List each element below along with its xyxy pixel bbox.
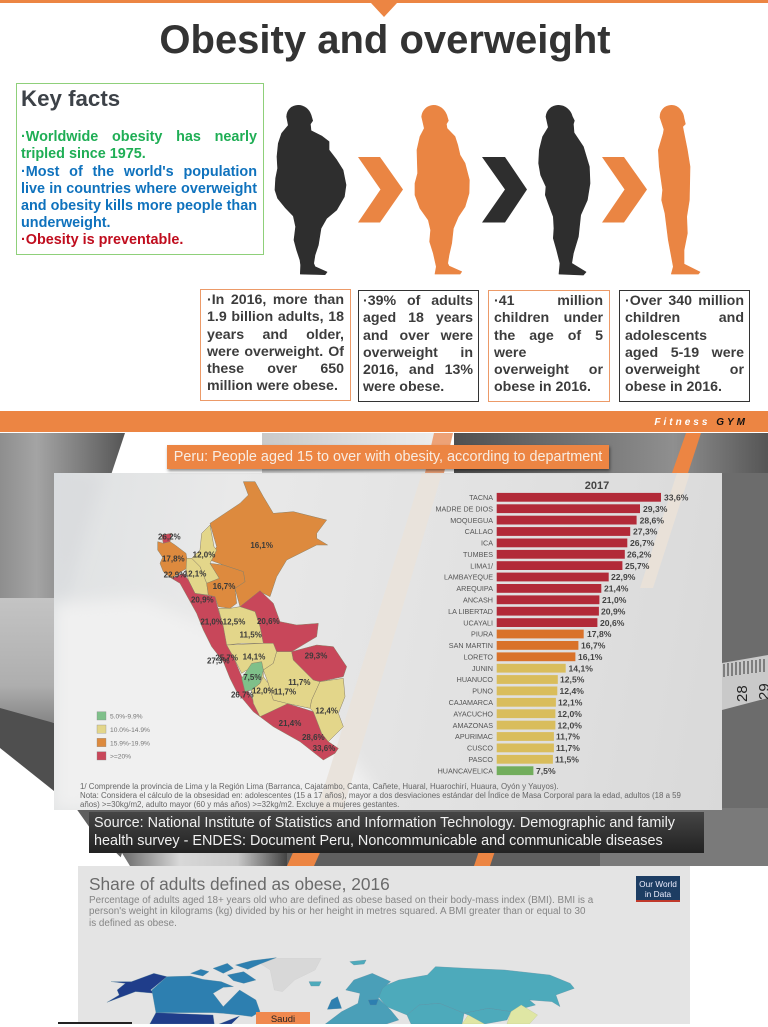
map value labels: 27,3%	[207, 656, 230, 665]
stat text 2: were obese.	[363, 379, 444, 395]
department labels: TUMBES	[463, 550, 493, 559]
stat text 4: children and	[625, 310, 744, 326]
bar values: 17,8%	[587, 629, 612, 639]
map region: Arctic islands	[191, 958, 276, 983]
bar values: 12,4%	[560, 686, 584, 696]
source note	[89, 812, 704, 853]
map value labels: 21,0%	[200, 617, 223, 626]
key facts text	[21, 129, 257, 248]
key facts text: ·Most of the world's population	[21, 164, 257, 180]
bar values: 27,3%	[633, 527, 658, 537]
department labels	[435, 493, 493, 775]
bar values: 12,0%	[558, 720, 582, 730]
map region: Huancavelica	[242, 662, 263, 692]
bar values: 11,5%	[555, 754, 579, 764]
icon: very overweight orange silhouette	[415, 105, 469, 274]
chart footnote: Nota: Considera el cálculo de la obsesidad en: adolescentes (15 a 17 años), mayor a dos desviaciones estándar del Índice de Masa Corporal para la edad, adultos (18 a 59	[80, 791, 681, 800]
department labels: LORETO	[464, 652, 493, 662]
stat text 2: 2016, and 13%	[363, 362, 473, 378]
map value labels: 26,2%	[158, 532, 181, 541]
map region: Mongolia	[464, 1008, 511, 1024]
map value labels: 17,8%	[162, 554, 185, 563]
bar values: 12,5%	[560, 675, 585, 685]
source note: Source: National Institute of Statistics and Information Technology. Demographic and family	[94, 815, 675, 831]
logo: Our World in Data: in Data	[645, 889, 671, 899]
key facts text: ·Worldwide obesity has nearly	[21, 129, 257, 145]
bar values: 11,7%	[556, 732, 580, 742]
stat text 4: aged 5-19 were	[625, 345, 744, 361]
map region: eastern United States	[219, 1016, 240, 1024]
chart footnote: 1/ Comprende la provincia de Lima y la Región Lima (Barranca, Cajatambo, Canta, Cañete, Huaral, Huarochirí, Huaura, Oyón y Yauyos).	[80, 782, 559, 790]
stat text 4	[625, 293, 744, 395]
panel: world obesity chart	[78, 866, 690, 1024]
department labels: PIURA	[471, 630, 493, 639]
bar values	[536, 492, 689, 776]
department labels: PUNO	[472, 687, 493, 696]
department labels: AREQUIPA	[456, 584, 493, 593]
map value labels: 25,7%	[215, 653, 238, 662]
department labels: AYACUCHO	[453, 709, 493, 718]
stat text 4: ·Over 340 million	[625, 293, 744, 309]
chart footnote: años) >=30kg/m2, adulto mayor (60 y más años) >=32kg/m2. Excluye a mujeres gestantes.	[80, 800, 399, 809]
map value labels: 20,6%	[257, 617, 280, 626]
stat text 1: ·In 2016, more than	[207, 292, 344, 308]
icon: orange chevron 1	[358, 157, 403, 222]
map region: Madre de Dios	[292, 645, 347, 682]
map value labels: 11,7%	[288, 678, 310, 687]
icon: overweight dark silhouette	[539, 105, 590, 275]
map value labels: 14,1%	[243, 652, 265, 661]
map legend: 10.0%-14.9%	[110, 727, 150, 734]
title: Obesity and overweight	[159, 18, 611, 62]
key facts text: underweight.	[21, 215, 111, 231]
stat text 2: overweight in	[363, 345, 473, 361]
icon: dark chevron	[482, 157, 527, 222]
map region: Tumbes	[162, 533, 172, 543]
bar values: 28,6%	[640, 515, 664, 525]
bar values: 21,4%	[604, 584, 629, 594]
stat text 3: children under	[494, 310, 603, 326]
panel: Peru chart	[54, 473, 722, 810]
map region: Greenland	[260, 958, 321, 992]
stat box 3	[488, 290, 610, 402]
bar values: 16,7%	[581, 641, 606, 651]
stat text 2: aged 18 years	[363, 310, 473, 326]
tape measure numbers: 28	[734, 685, 751, 702]
bar values: 29,3%	[643, 504, 668, 514]
map region: Cajamarca	[186, 558, 208, 595]
map corner edge	[58, 1022, 132, 1024]
chart heading: Peru: People aged 15 to over with obesity, according to department	[174, 449, 602, 465]
department labels: APURIMAC	[455, 732, 493, 741]
tape measure numbers	[724, 659, 768, 702]
icon: orange chevron 2	[602, 157, 647, 222]
map region: Piura	[158, 542, 187, 578]
map region: Ucayali	[240, 591, 318, 652]
map region: San Martin	[207, 563, 245, 608]
department labels: CAJAMARCA	[449, 698, 493, 707]
world chart description: is defined as obese.	[89, 918, 177, 929]
map region: Central Asia	[407, 1003, 464, 1024]
department labels: LAMBAYEQUE	[444, 573, 493, 582]
silhouettes and chevrons	[274, 105, 700, 276]
department labels: JUNIN	[472, 664, 493, 673]
bar values: 16,1%	[578, 652, 603, 662]
stat text 3	[494, 293, 603, 395]
map value labels: 12,0%	[193, 550, 215, 559]
chart heading	[167, 445, 609, 469]
bar values: 25,7%	[625, 561, 650, 571]
department labels: HUANUCO	[457, 675, 493, 684]
map value labels: 16,1%	[250, 541, 273, 550]
map region: United Kingdom	[327, 997, 342, 1009]
bar values: 26,7%	[630, 538, 655, 548]
stat text 1	[207, 292, 344, 394]
world chart description: person's weight in kilograms (kg) divided by his or her height in metres squared. A BMI greater than or equal to 30	[89, 906, 585, 917]
map of Peru	[96, 481, 347, 761]
map value labels: 12,4%	[315, 707, 338, 716]
map value labels: 22,9%	[164, 571, 186, 580]
stat text 3: were	[494, 345, 526, 361]
key facts text: ·Obesity is preventable.	[21, 232, 183, 248]
department labels: SAN MARTIN	[449, 641, 493, 650]
map region: South Asia	[462, 1015, 484, 1024]
map region: Canada	[152, 976, 260, 1017]
map region: Junin	[227, 643, 277, 680]
department labels: MOQUEGUA	[450, 516, 493, 525]
map region: Russia	[378, 967, 574, 1015]
icon: normal weight orange silhouette	[658, 105, 700, 274]
bar values: 33,6%	[664, 492, 689, 502]
panel: key facts	[16, 83, 264, 255]
world chart description: Percentage of adults aged 18+ years old who are defined as obese based on their body-mass index (BMI). BMI is a	[89, 894, 593, 906]
map value labels	[158, 532, 338, 753]
stat text 3: overweight or	[494, 362, 603, 378]
map value labels: 11,5%	[240, 631, 262, 640]
chart year: 2017	[585, 480, 609, 492]
map region: Amazonas	[192, 525, 219, 583]
bars	[497, 493, 661, 775]
map region: coast	[172, 573, 338, 760]
map value labels: 20,9%	[191, 595, 214, 604]
department labels: ANCASH	[463, 596, 493, 604]
stat text 1: these over 650	[207, 361, 344, 377]
banner label: Fitness GYM	[654, 417, 748, 428]
map region: Loreto	[210, 482, 328, 607]
bar values: 20,6%	[600, 618, 625, 628]
map value labels: 33,6%	[313, 744, 335, 753]
bar chart: obesity by department	[435, 480, 689, 776]
key facts text: live in countries where overweight	[21, 181, 257, 197]
stat text 3: obese in 2016.	[494, 379, 591, 395]
source note: health survey - ENDES: Document Peru, Noncommunicable and communicable diseases	[94, 833, 663, 849]
orange banner	[0, 411, 768, 432]
stat text 1: years and older,	[207, 327, 344, 343]
map tooltip	[256, 1012, 310, 1024]
map region: China	[507, 1005, 538, 1024]
logo: Our World in Data: Our World	[639, 879, 677, 889]
stat text 4: adolescents	[625, 328, 707, 344]
map region: United States	[150, 1013, 214, 1024]
map value labels: 12,1%	[184, 569, 206, 578]
map value labels: 29,3%	[305, 652, 327, 661]
world chart description	[89, 894, 594, 929]
bar values: 26,2%	[627, 550, 652, 560]
stat box 4	[619, 290, 750, 402]
bar values: 7,5%	[536, 766, 556, 776]
department labels: TACNA	[469, 493, 493, 502]
map region: Alaska	[107, 973, 167, 1002]
stat text 1: million were obese.	[207, 378, 338, 394]
map region: Cusco and Apurimac	[263, 652, 320, 708]
map value labels: 11,7%	[274, 688, 296, 697]
bar values: 20,9%	[601, 606, 626, 616]
department labels: ICA	[481, 539, 493, 548]
bar values: 11,7%	[556, 743, 580, 753]
map legend	[97, 712, 150, 761]
map region: Europe	[325, 973, 399, 1024]
department labels: LA LIBERTAD	[448, 607, 493, 616]
stat text 4: overweight or	[625, 362, 744, 378]
stat text 1: 1.9 billion adults, 18	[207, 309, 344, 325]
background photo	[0, 433, 768, 866]
map value labels: 16,7%	[213, 582, 235, 591]
department labels: CUSCO	[467, 744, 493, 753]
stat text 2: and over were	[363, 328, 473, 344]
key facts heading: Key facts	[21, 86, 120, 111]
department labels: PASCO	[468, 755, 493, 764]
map value labels: 26,7%	[231, 691, 254, 700]
department labels: UCAYALI	[463, 618, 493, 627]
map region: Svalbard	[350, 960, 366, 965]
stat text 1: were overweight. Of	[207, 344, 344, 360]
bar values: 12,1%	[558, 698, 583, 708]
map region: Ayacucho	[252, 677, 288, 717]
map value labels: 12,0%	[252, 686, 275, 695]
icon: obese dark silhouette	[275, 105, 346, 275]
map value labels: 21,4%	[279, 719, 301, 728]
department labels: MADRE DE DIOS	[435, 504, 493, 513]
department labels: CALLAO	[465, 527, 493, 536]
stat text 2: ·39% of adults	[363, 293, 473, 309]
map value labels: 28,6%	[302, 733, 325, 742]
map region: eastern Europe	[368, 999, 378, 1005]
top accent bar	[0, 0, 768, 17]
bar values: 14,1%	[568, 663, 593, 673]
logo: Our World in Data	[636, 876, 680, 902]
stat text 2	[363, 293, 473, 395]
stat text 3: the age of 5	[494, 328, 603, 344]
stat text 4: obese in 2016.	[625, 379, 722, 395]
key facts text: tripled since 1975.	[21, 146, 146, 162]
map value labels: 12,5%	[223, 617, 245, 626]
faint photo shading inside panel	[54, 473, 690, 810]
chart footnote	[80, 782, 681, 809]
map region: Puno	[310, 678, 345, 742]
department labels: AMAZONAS	[453, 721, 493, 730]
map legend: >=20%	[110, 754, 131, 761]
department labels: HUANCAVELICA	[438, 766, 493, 775]
bar values: 21,0%	[602, 595, 627, 605]
department labels: LIMA1/	[470, 561, 493, 570]
stat box 1	[200, 289, 351, 401]
map tooltip: Saudi	[271, 1014, 295, 1025]
stat box 2	[358, 290, 479, 402]
bar values: 12,0%	[558, 709, 582, 719]
map legend: 5.0%-9.9%	[110, 714, 143, 721]
stat text 3: ·41 million	[494, 293, 603, 309]
world chart title: Share of adults defined as obese, 2016	[89, 874, 390, 894]
map region: central highlands	[218, 607, 263, 645]
map value labels: 7,5%	[243, 673, 261, 682]
world map	[106, 957, 574, 1024]
key facts text: and obesity kills more people than	[21, 198, 257, 214]
map region: Iceland	[309, 982, 321, 986]
bar values: 22,9%	[611, 572, 636, 582]
map legend: 15.9%-19.9%	[110, 740, 150, 747]
